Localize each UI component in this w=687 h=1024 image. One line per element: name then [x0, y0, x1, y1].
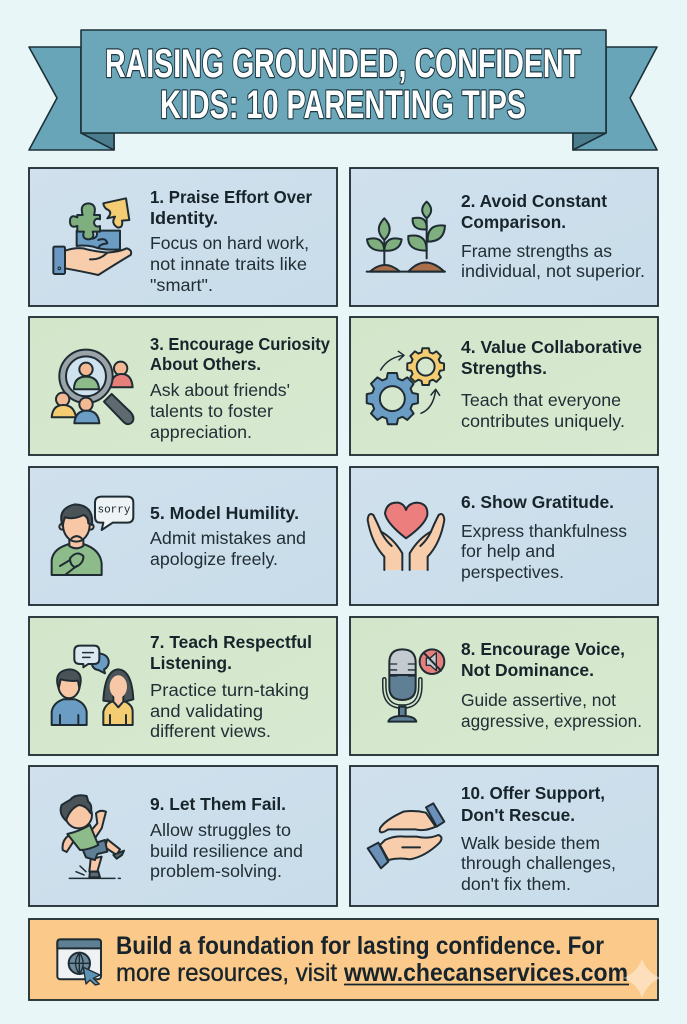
icon: two gears with arrows	[367, 348, 444, 424]
tip 6 text: Express thankfulness	[461, 521, 627, 541]
tip 1 text: "smart".	[150, 275, 213, 295]
tip 7 text	[150, 632, 312, 741]
icon: browser window with cursor	[57, 939, 101, 985]
tip 2 text: 2. Avoid Constant	[461, 191, 607, 211]
tip 1 text: Focus on hard work,	[150, 233, 309, 253]
tip 5 text: 5. Model Humility.	[150, 503, 299, 523]
tip 6 text: for help and	[461, 541, 555, 561]
icon: two seedlings	[367, 202, 445, 272]
icon: two people talking	[52, 646, 133, 725]
footer text: www.checanservices.com	[343, 960, 628, 987]
tip 10 text: 10. Offer Support,	[461, 783, 605, 803]
panel: tip 2	[350, 168, 658, 306]
icon: microphone with muted speaker	[384, 649, 444, 722]
tip 9 text: Allow struggles to	[150, 820, 291, 840]
tip 5 text: apologize freely.	[150, 549, 278, 569]
tip 10 text: Don't Rescue.	[461, 805, 575, 825]
panel: tip 3	[29, 317, 337, 455]
footer callout	[29, 919, 661, 1000]
tip 8 text: Not Dominance.	[461, 660, 594, 680]
panel: tip 6	[350, 467, 658, 605]
tip 7 text: and validating	[150, 701, 263, 721]
icon: magnifier over people	[52, 350, 133, 424]
tip 6 text: 6. Show Gratitude.	[461, 492, 614, 512]
tip 4 text: contributes uniquely.	[461, 411, 625, 431]
tip 9 text	[150, 794, 303, 881]
tip 9 text: problem-solving.	[150, 861, 282, 881]
tip 1 text: 1. Praise Effort Over	[150, 187, 312, 207]
title text: KIDS: 10 PARENTING TIPS	[160, 83, 526, 127]
tip 10 text	[461, 783, 616, 894]
tip 7 text: different views.	[150, 721, 271, 741]
tip 4 text: Teach that everyone	[461, 390, 621, 410]
tip 9 text: 9. Let Them Fail.	[150, 794, 286, 814]
tip 3 text	[150, 334, 330, 442]
tip 7 text: Listening.	[150, 653, 232, 673]
panel: tip 8	[350, 617, 658, 755]
tip 8 text: 8. Encourage Voice,	[461, 639, 625, 659]
tip 3 text: About Others.	[150, 354, 261, 374]
panel: tip 9	[29, 766, 337, 906]
tip 4 text: Strengths.	[461, 358, 547, 378]
footer text	[116, 933, 629, 987]
tip 1 text	[150, 187, 312, 295]
icon: supporting hands	[368, 803, 444, 868]
tip 8 text: Guide assertive, not	[461, 690, 616, 710]
tip 2 text	[461, 191, 645, 281]
tip 10 text: through challenges,	[461, 853, 616, 873]
icon: person saying sorry	[52, 497, 133, 575]
tip 8 text	[461, 639, 642, 731]
icon: child stumbling	[61, 795, 124, 878]
tip 1 text: Identity.	[150, 208, 218, 228]
tip 3 text: Ask about friends'	[150, 380, 290, 400]
panel: tip 10	[350, 766, 658, 906]
tip 3 text: 3. Encourage Curiosity	[150, 334, 330, 354]
tip 6 text	[461, 492, 627, 582]
footer text: more resources, visit	[116, 960, 337, 987]
tip 2 text: Comparison.	[461, 212, 566, 232]
tip 2 text: Frame strengths as	[461, 241, 612, 261]
tip 8 text: aggressive, expression.	[461, 711, 642, 731]
tip 9 text: build resilience and	[150, 841, 303, 861]
panel: tip 7	[29, 617, 337, 755]
icon: hands cradling heart	[368, 503, 444, 570]
tip 3 text: appreciation.	[150, 422, 252, 442]
tip 7 text: Practice turn-taking	[150, 680, 309, 700]
panel: tip 5	[29, 467, 337, 605]
sparkle mark	[623, 959, 661, 998]
title text	[105, 42, 581, 127]
tip 4 text	[461, 337, 642, 431]
tip 10 text: Walk beside them	[461, 833, 600, 853]
tip 5 text: Admit mistakes and	[150, 528, 306, 548]
tip 7 text: 7. Teach Respectful	[150, 632, 312, 652]
panel: tip 4	[350, 317, 658, 455]
panel: tip 1	[29, 168, 337, 306]
footer text: Build a foundation for lasting confidence. For	[116, 933, 604, 960]
title banner	[29, 30, 657, 150]
icon: person saying sorry: sorry	[98, 505, 131, 517]
tip 6 text: perspectives.	[461, 562, 564, 582]
tip 1 text: not innate traits like	[150, 254, 307, 274]
tip 4 text: 4. Value Collaborative	[461, 337, 642, 357]
tip 2 text: individual, not superior.	[461, 261, 645, 281]
tip 5 text	[150, 503, 306, 569]
icon: hand holding puzzle pieces	[53, 198, 131, 275]
tip 10 text: don't fix them.	[461, 874, 571, 894]
tip 3 text: talents to foster	[150, 401, 273, 421]
